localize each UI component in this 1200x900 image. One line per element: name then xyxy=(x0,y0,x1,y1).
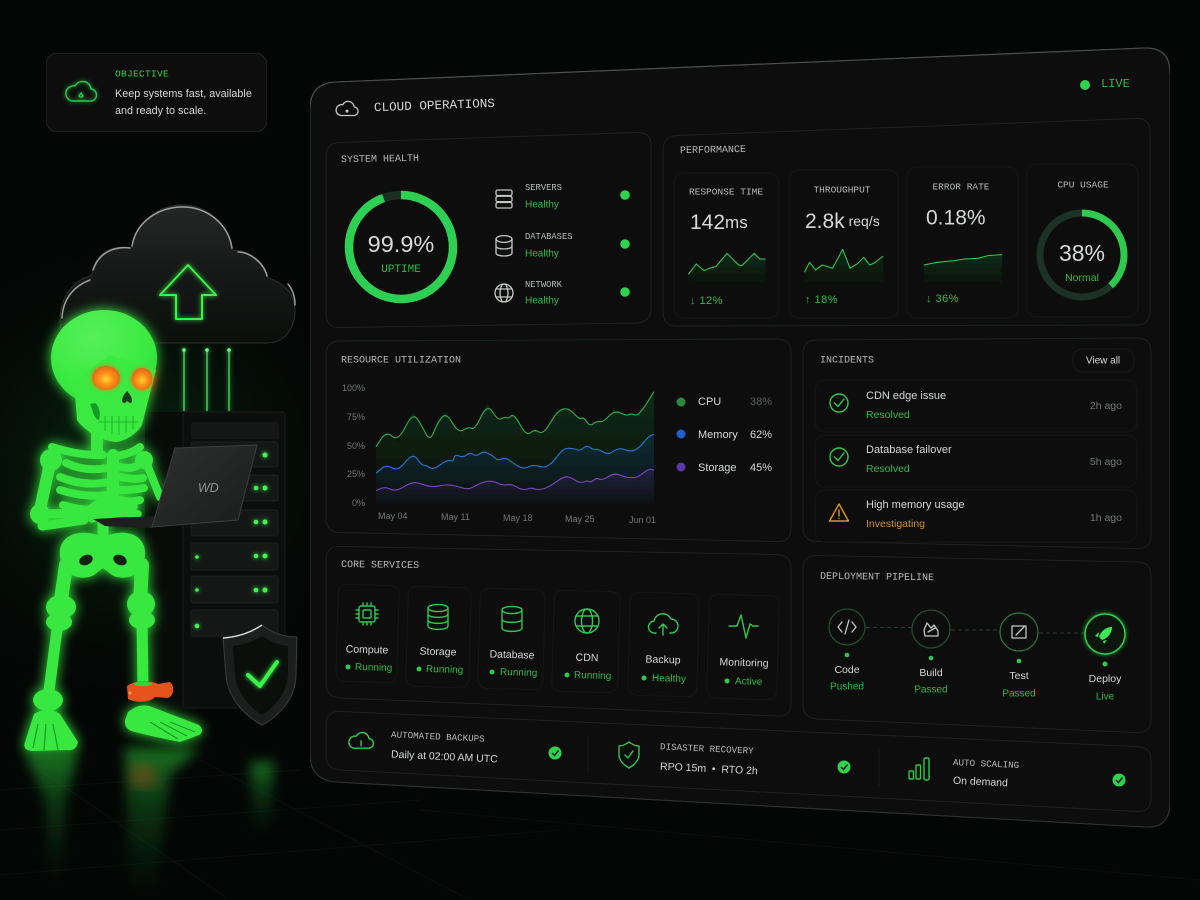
live status xyxy=(1080,77,1130,91)
card: cpu usage xyxy=(1027,164,1138,317)
x axis labels: May 18 xyxy=(503,513,533,523)
card: cpu usage: CPU USAGE xyxy=(1057,180,1109,190)
cloud highlight xyxy=(62,207,295,318)
skull xyxy=(51,310,157,442)
feature: auto scaling: AUTO SCALING xyxy=(953,757,1019,771)
x axis labels: May 04 xyxy=(378,511,408,521)
dashboard panel xyxy=(310,48,1170,827)
sparkline: throughput xyxy=(804,249,883,285)
heading: SYSTEM HEALTH xyxy=(341,154,419,166)
incident: database failover xyxy=(815,435,1137,487)
y axis labels xyxy=(342,383,365,508)
rib cage xyxy=(52,447,144,509)
live status: LIVE xyxy=(1101,77,1130,91)
illustration: laptop xyxy=(93,445,257,528)
service: monitoring xyxy=(707,594,779,700)
feature: disaster recovery xyxy=(619,741,850,777)
panel: performance xyxy=(663,118,1150,326)
service: database xyxy=(478,588,545,690)
cpu donut xyxy=(1040,213,1124,297)
right foot xyxy=(125,705,202,742)
illustration: cloud with upload arrow xyxy=(60,205,295,343)
service: cdn: CDN xyxy=(575,652,599,664)
eyes xyxy=(92,366,152,390)
service: compute: Compute xyxy=(346,643,389,657)
y axis labels: 100% xyxy=(342,383,365,393)
panel: incidents xyxy=(803,338,1151,549)
legend: 38% xyxy=(750,396,772,408)
status: servers xyxy=(481,177,640,218)
cpu donut: 38% xyxy=(1059,240,1105,266)
card: throughput xyxy=(789,170,898,318)
status: network xyxy=(481,271,640,316)
nose xyxy=(122,391,132,403)
card: response time: ↓ 12% xyxy=(690,295,723,307)
hands xyxy=(84,499,138,519)
icon: header cloud xyxy=(336,101,358,115)
floor reflections xyxy=(25,748,274,895)
feature: automated backups: Daily at 02:00 AM UTC xyxy=(391,748,498,766)
neck xyxy=(91,432,103,452)
y axis labels: 50% xyxy=(347,441,365,451)
feature: automated backups: AUTOMATED BACKUPS xyxy=(391,729,485,745)
card: error rate: ↓ 36% xyxy=(926,293,959,305)
status: databases xyxy=(481,225,640,268)
illustration: shield xyxy=(223,625,297,725)
service: storage xyxy=(406,586,471,688)
card: throughput: 2.8k req/s xyxy=(805,210,880,232)
card: response time xyxy=(674,173,779,318)
legend: Storage xyxy=(698,462,737,474)
legend: 45% xyxy=(750,462,772,474)
incident: database failover: 5h ago xyxy=(1090,456,1122,468)
step: deploy: Deploy xyxy=(1089,673,1122,685)
area chart xyxy=(376,392,654,507)
uptime gauge xyxy=(349,195,453,299)
service: database: Database xyxy=(489,648,535,662)
objective callout xyxy=(46,53,267,132)
uptime gauge: UPTIME xyxy=(381,264,421,276)
service: database: Running xyxy=(500,667,537,679)
feature: automated backups xyxy=(349,729,562,766)
sparkline: response xyxy=(688,253,766,285)
status: servers: SERVERS xyxy=(525,183,562,193)
objective text: OBJECTIVE xyxy=(115,68,169,80)
panel: deployment pipeline xyxy=(803,555,1151,733)
card: throughput: THROUGHPUT xyxy=(813,184,871,196)
x axis labels xyxy=(378,511,656,525)
card: error rate: ERROR RATE xyxy=(932,182,990,192)
service: backup xyxy=(628,592,699,697)
card: throughput: ↑ 18% xyxy=(805,294,838,306)
panel: system health xyxy=(326,132,651,328)
rack units xyxy=(191,442,278,636)
y axis labels: 25% xyxy=(347,469,365,479)
heading: CORE SERVICES xyxy=(341,560,419,572)
incident: high memory usage: 1h ago xyxy=(1090,512,1122,524)
rack LEDs xyxy=(195,452,268,628)
status: databases: DATABASES xyxy=(525,232,573,242)
illustration: ankle cuff xyxy=(127,681,173,702)
feature: disaster recovery: DISASTER RECOVERY xyxy=(660,741,754,757)
incident: cdn edge issue xyxy=(815,380,1137,432)
status: network: Healthy xyxy=(525,296,559,306)
view all button: View all xyxy=(1086,356,1120,366)
pipeline connectors xyxy=(866,628,1085,633)
arms xyxy=(30,449,160,526)
legend xyxy=(676,396,772,474)
feature: auto scaling: On demand xyxy=(953,775,1008,789)
status: databases: Healthy xyxy=(525,248,559,260)
x axis labels: Jun 01 xyxy=(629,515,656,525)
feature: disaster recovery: RPO 15m • RTO 2h xyxy=(660,761,758,777)
step: deploy xyxy=(1085,614,1125,702)
panel: bottom status bar xyxy=(326,711,1151,812)
step: deploy: Live xyxy=(1096,692,1115,702)
incident: database failover: Resolved xyxy=(866,463,910,475)
step: build: Build xyxy=(919,667,943,679)
y axis labels: 75% xyxy=(347,412,365,422)
sparkline: error rate xyxy=(924,255,1002,285)
legend: 62% xyxy=(750,429,772,441)
x axis labels: May 25 xyxy=(565,514,595,524)
feature: auto scaling xyxy=(909,757,1126,789)
card: error rate: 0.18% xyxy=(926,206,986,230)
step: test: Test xyxy=(1009,670,1029,682)
heading: DEPLOYMENT PIPELINE xyxy=(820,572,934,584)
service: cdn: Running xyxy=(574,670,611,682)
status: network: NETWORK xyxy=(525,280,563,290)
incident: cdn edge issue: CDN edge issue xyxy=(866,390,946,402)
card: response time: RESPONSE TIME xyxy=(689,186,763,198)
panel: core services xyxy=(326,546,791,716)
heading: PERFORMANCE xyxy=(680,145,746,157)
card: error rate xyxy=(907,167,1018,318)
y axis labels: 0% xyxy=(352,498,365,508)
joints xyxy=(33,591,155,711)
icon: upload arrow xyxy=(160,265,216,319)
service: compute: Running xyxy=(355,662,392,674)
x axis labels: May 11 xyxy=(441,512,470,522)
step: test: Passed xyxy=(1002,688,1036,700)
objective text: and ready to scale. xyxy=(115,105,206,117)
uptime gauge: 99.9% xyxy=(368,231,434,257)
pelvis xyxy=(60,533,145,578)
legend: Memory xyxy=(698,429,738,441)
icon: shield check xyxy=(248,662,277,686)
incident: cdn edge issue: 2h ago xyxy=(1090,400,1122,412)
left foot xyxy=(24,710,78,751)
incident: high memory usage: Investigating xyxy=(866,518,925,530)
dashboard header xyxy=(336,77,1130,115)
objective text xyxy=(115,68,252,117)
view all button xyxy=(1073,349,1134,372)
heading: RESOURCE UTILIZATION xyxy=(341,356,461,366)
incident: high memory usage: High memory usage xyxy=(866,499,964,511)
illustration: laptop: WD xyxy=(198,481,219,495)
incident: cdn edge issue: Resolved xyxy=(866,409,910,421)
heading: cloud operations: CLOUD OPERATIONS xyxy=(374,97,495,115)
connector lines xyxy=(182,348,231,411)
step: code: Pushed xyxy=(830,682,864,692)
objective text: Keep systems fast, available xyxy=(115,88,252,100)
card: response time: 142ms xyxy=(690,210,748,234)
service: storage: Storage xyxy=(419,645,457,659)
panel: resource utilization xyxy=(326,339,791,542)
service: compute xyxy=(336,584,399,683)
icon: objective cloud xyxy=(66,81,97,101)
service: monitoring: Monitoring xyxy=(719,656,769,670)
incident: database failover: Database failover xyxy=(866,444,952,456)
service: storage: Running xyxy=(426,664,463,676)
incident: high memory usage xyxy=(815,490,1137,542)
step: code xyxy=(829,609,865,692)
step: build: Passed xyxy=(914,684,948,696)
status: servers: Healthy xyxy=(525,200,559,210)
cloud base glow xyxy=(150,342,282,344)
heading: INCIDENTS xyxy=(820,356,874,366)
service: cdn xyxy=(552,590,620,693)
illustration: server rack xyxy=(145,412,285,708)
step: test xyxy=(1000,613,1038,700)
spine xyxy=(98,505,108,542)
cpu donut: Normal xyxy=(1065,272,1099,284)
legs xyxy=(48,565,143,698)
illustration: skeleton xyxy=(24,310,202,751)
service: monitoring: Active xyxy=(735,676,763,688)
step: build xyxy=(912,610,950,696)
step: code: Code xyxy=(834,664,860,676)
legend: CPU xyxy=(698,396,721,408)
service: backup: Backup xyxy=(645,654,681,666)
service: backup: Healthy xyxy=(652,673,686,685)
